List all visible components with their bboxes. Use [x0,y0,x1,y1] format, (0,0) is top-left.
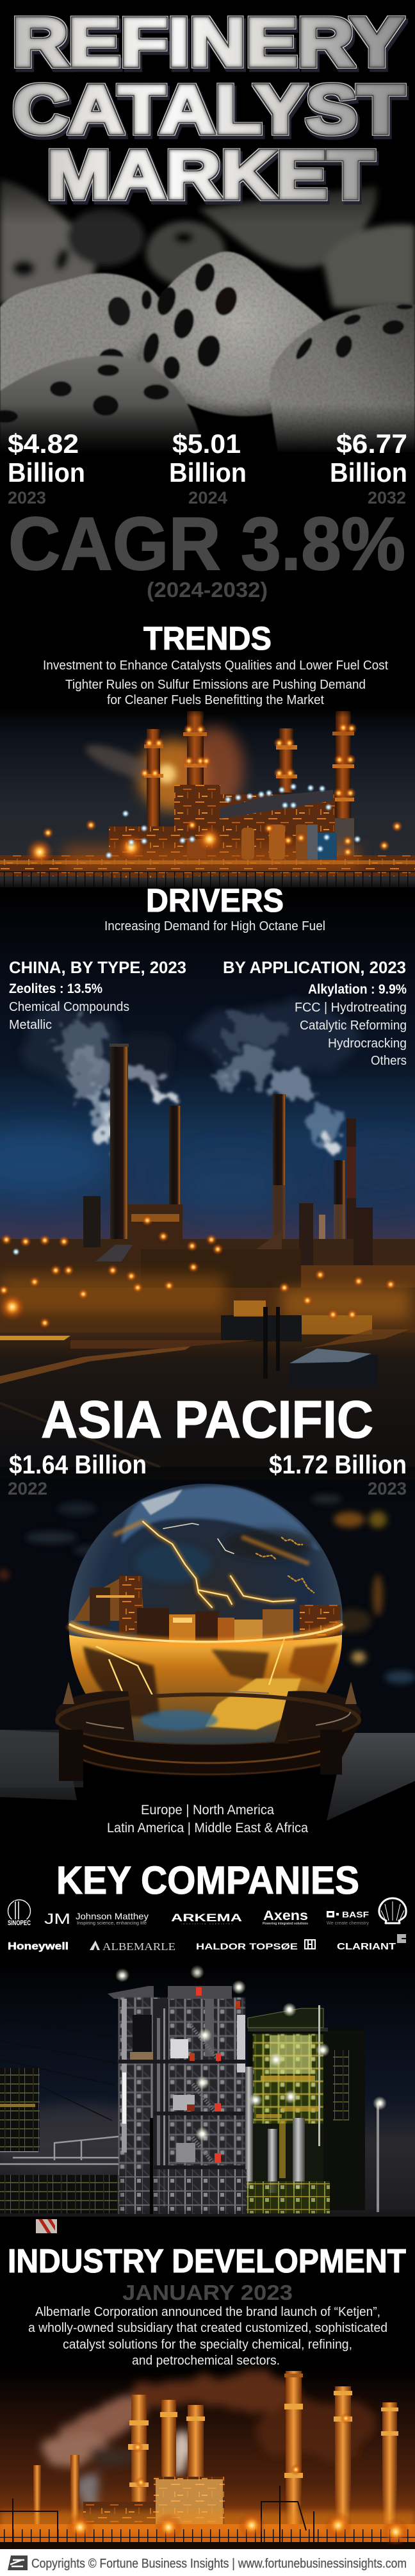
stat: 2024: $5.01 [172,429,241,459]
panel: trends [0,620,415,890]
stat: 2024 [169,429,247,507]
panel: Asia Pacific [0,1390,415,1835]
logo: Johnson Matthey: JM [44,1910,70,1927]
development text: catalyst solutions for the specialty chemical, refining, [63,2338,352,2352]
regions text: Europe | North America [141,1803,274,1817]
logo: BASF: We create chemistry [327,1920,369,1926]
stat: 2023: Billion [8,457,85,488]
list: by application: Hydrocracking [328,1037,407,1051]
stat: 2023: 2023 [368,1479,407,1498]
list: by application: Others [371,1054,407,1068]
trends text: Investment to Enhance Catalysts Qualities and Lower Fuel Cost [43,659,388,673]
panel: market size stats [8,429,407,602]
stat: 2023: $4.82 [8,429,79,459]
list: by application: BY APPLICATION, 2023 [223,958,406,977]
logo: Honeywell: Honeywell [8,1941,69,1952]
drivers text: Increasing Demand for High Octane Fuel [104,919,325,933]
globe base [56,1682,361,1781]
stat: 2032: Billion [330,457,407,488]
warning sign [36,2219,57,2233]
trends text: Tighter Rules on Sulfur Emissions are Pushing Demand [65,678,366,692]
logo: Albemarle: ALBEMARLE [102,1940,175,1953]
logo: Johnson Matthey [44,1910,149,1927]
logo: BASF [327,1910,369,1926]
heading: Asia Pacific: ASIA PACIFIC [41,1390,373,1449]
trends text: for Cleaner Fuels Benefitting the Market [107,693,324,707]
list: by application: FCC | Hydrotreating [295,1001,407,1015]
logo: Shell [379,1898,406,1923]
heading: key companies: KEY COMPANIES [56,1858,359,1902]
stat: 2023 [269,1450,407,1498]
photo: refinery at night [0,705,415,890]
list: by application: Catalytic Reforming [300,1019,407,1033]
lightning [115,1522,314,1607]
logo: Clariant: CLARIANT [337,1941,396,1952]
lower hemisphere [69,1635,342,1744]
title: REFINERY [12,4,403,80]
list: China by type: Zeolites : 13.5% [9,981,102,996]
panel: header with catalyst pellets [0,0,415,459]
title: CATALYST [13,72,404,147]
panel: industry development [0,2243,415,2550]
pipe racks [0,2068,379,2214]
logo: Arkema: INNOVATIVE CHEMISTRY [181,1923,232,1925]
icon: Fortune Business Insights logo [8,2555,28,2570]
work lights [115,1965,387,2141]
stat: 2032 [330,429,407,507]
list: China by type [9,958,186,1032]
heading: drivers: DRIVERS [146,882,284,919]
photo: table and bokeh background [0,1467,415,1821]
panel: drivers [0,882,415,1482]
equator band [69,1624,343,1643]
photo: catalyst pellets [0,0,415,459]
photo: lit plant and ground [0,1196,415,1482]
stat: 2024: Billion [169,457,247,488]
stat: 2023: 2023 [8,488,46,507]
list: by application [223,958,407,1068]
CAGR period: (2024-2032) [147,578,268,602]
development text: Albemarle Corporation announced the brand launch of “Ketjen”, [35,2305,380,2319]
stat: 2022: 2022 [8,1479,47,1498]
photo: refinery with orange smoke [0,2364,415,2550]
list: China by type: Chemical Compounds [9,1000,129,1014]
photo: smokestacks at dusk [0,887,415,1263]
logo: Clariant [337,1934,406,1952]
tower right [245,2005,365,2210]
development text [28,2305,387,2368]
development text: a wholly-owned subsidiary that created customized, sophisticated [28,2321,387,2335]
logo: Haldor Topsoe [196,1940,315,1951]
list: China by type: CHINA, BY TYPE, 2023 [9,958,186,977]
trends text [43,659,388,707]
regions text [107,1803,308,1835]
stat: 2022 [8,1450,147,1498]
stat: 2032: 2032 [368,488,406,507]
list: by application: Alkylation : 9.9% [308,982,407,997]
logo: BASF: BASF [342,1910,369,1919]
title [12,4,404,213]
panel: key companies [0,1858,415,2258]
photo: processing towers at night [0,1954,415,2258]
logo: Sinopec: SINOPEC [8,1919,31,1927]
globe [69,1484,343,1758]
stat: 2032: $6.77 [336,429,407,459]
tower left [108,1986,245,2210]
logo: Johnson Matthey: Inspiring science, enhancing life [77,1920,147,1926]
CAGR: CAGR 3.8% [8,502,405,586]
logo: Haldor Topsoe: HALDOR TOPSØE [196,1941,298,1951]
stat: 2023 [8,429,85,507]
logo: Axens: Axens [263,1908,308,1923]
footer [0,2549,415,2576]
list: China by type: Metallic [9,1018,52,1032]
miniature city [74,1576,341,1644]
date: JANUARY 2023 [122,2281,293,2304]
logo: Arkema: ARKEMA [171,1912,242,1924]
regions text: Latin America | Middle East & Africa [107,1821,308,1835]
logo: Axens: Powering integrated solutions [263,1922,308,1926]
heading: trends: TRENDS [143,620,272,657]
stat: 2022: $1.64 Billion [9,1450,147,1479]
title: MARKET [47,137,374,213]
logo: Sinopec [6,1900,33,1927]
development text: and petrochemical sectors. [132,2354,280,2368]
logo: Arkema [171,1912,242,1925]
stat: 2024: 2024 [188,488,227,507]
logo: Johnson Matthey: Johnson Matthey [76,1911,149,1921]
